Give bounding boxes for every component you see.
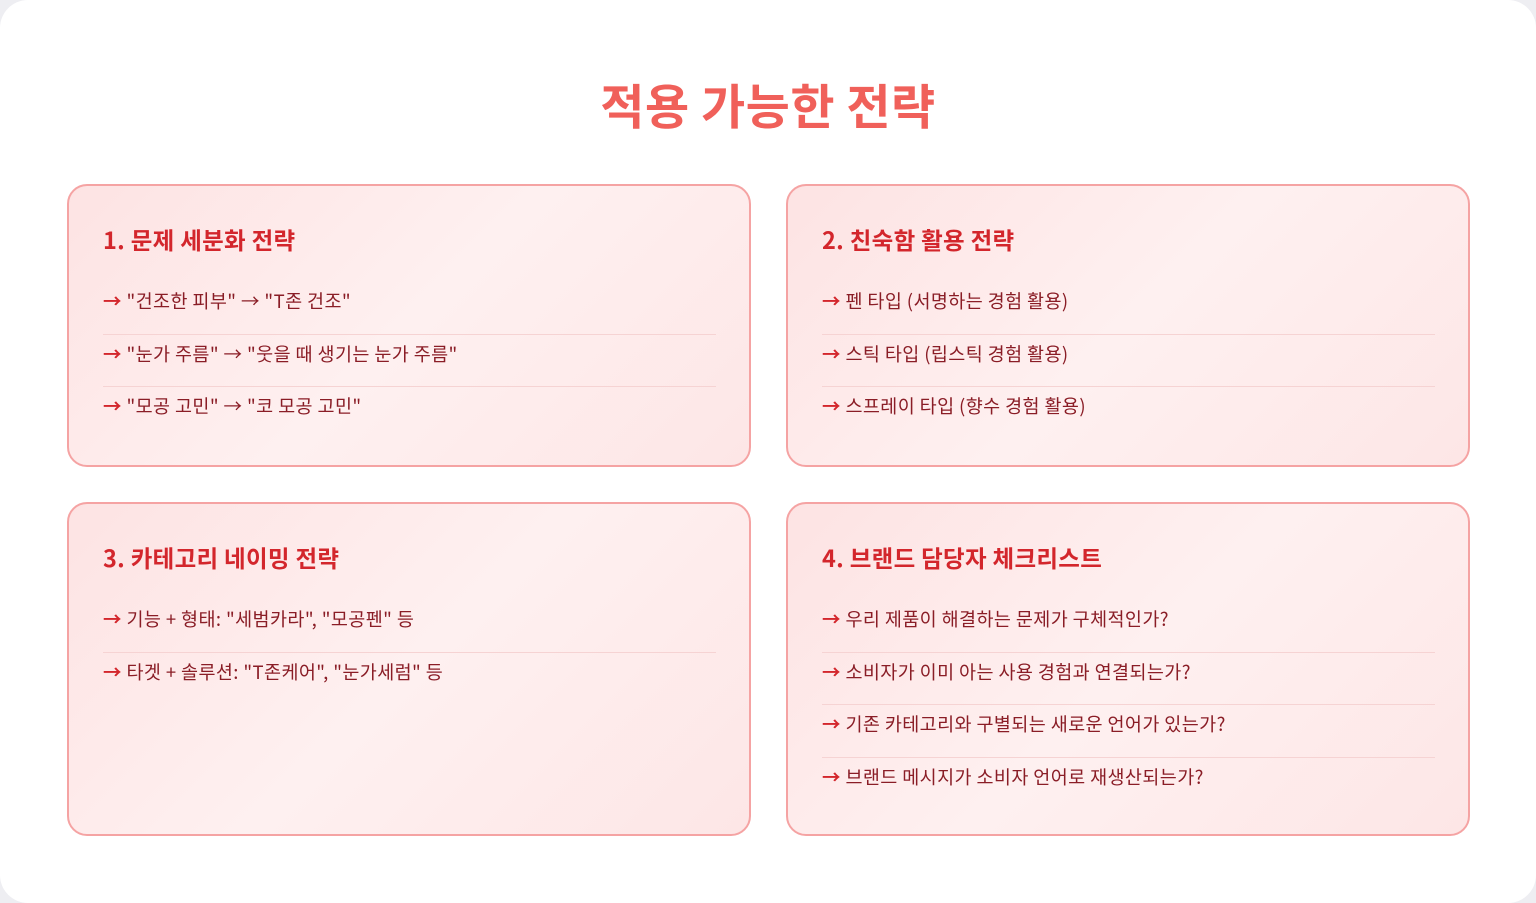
panel: 브랜드 담당자 체크리스트 [786, 502, 1470, 836]
list 2: → 펜 타입 (서명하는 경험 활용) [822, 288, 1069, 314]
list 3 [103, 606, 716, 684]
list 4: → 기존 카테고리와 구별되는 새로운 언어가 있는가? [822, 711, 1226, 737]
list 1 [103, 288, 716, 419]
list 1: → "눈가 주름" → "웃을 때 생기는 눈가 주름" [103, 340, 458, 366]
heading 3: 3. 카테고리 네이밍 전략 [103, 540, 339, 574]
heading 4: 4. 브랜드 담당자 체크리스트 [822, 540, 1102, 574]
list 4: → 브랜드 메시지가 소비자 언어로 재생산되는가? [822, 764, 1204, 790]
list 2: → 스틱 타입 (립스틱 경험 활용) [822, 340, 1069, 366]
list 3: → 기능 + 형태: "세범카라", "모공펜" 등 [103, 606, 414, 632]
panel: 친숙함 활용 전략 [786, 184, 1470, 467]
list 4 [822, 606, 1435, 790]
panel: 카테고리 네이밍 전략 [67, 502, 751, 836]
heading 1: 1. 문제 세분화 전략 [103, 222, 295, 256]
heading 2: 2. 친숙함 활용 전략 [822, 222, 1014, 256]
title: 적용 가능한 전략 [600, 68, 936, 138]
list 3: → 타겟 + 솔루션: "T존케어", "눈가세럼" 등 [103, 658, 443, 684]
list 4: → 우리 제품이 해결하는 문제가 구체적인가? [822, 606, 1169, 632]
list 2 [822, 288, 1435, 419]
panel: 문제 세분화 전략 [67, 184, 751, 467]
list 1: → "건조한 피부" → "T존 건조" [103, 288, 351, 314]
list 2: → 스프레이 타입 (향수 경험 활용) [822, 393, 1086, 419]
list 1: → "모공 고민" → "코 모공 고민" [103, 393, 362, 419]
list 4: → 소비자가 이미 아는 사용 경험과 연결되는가? [822, 658, 1191, 684]
